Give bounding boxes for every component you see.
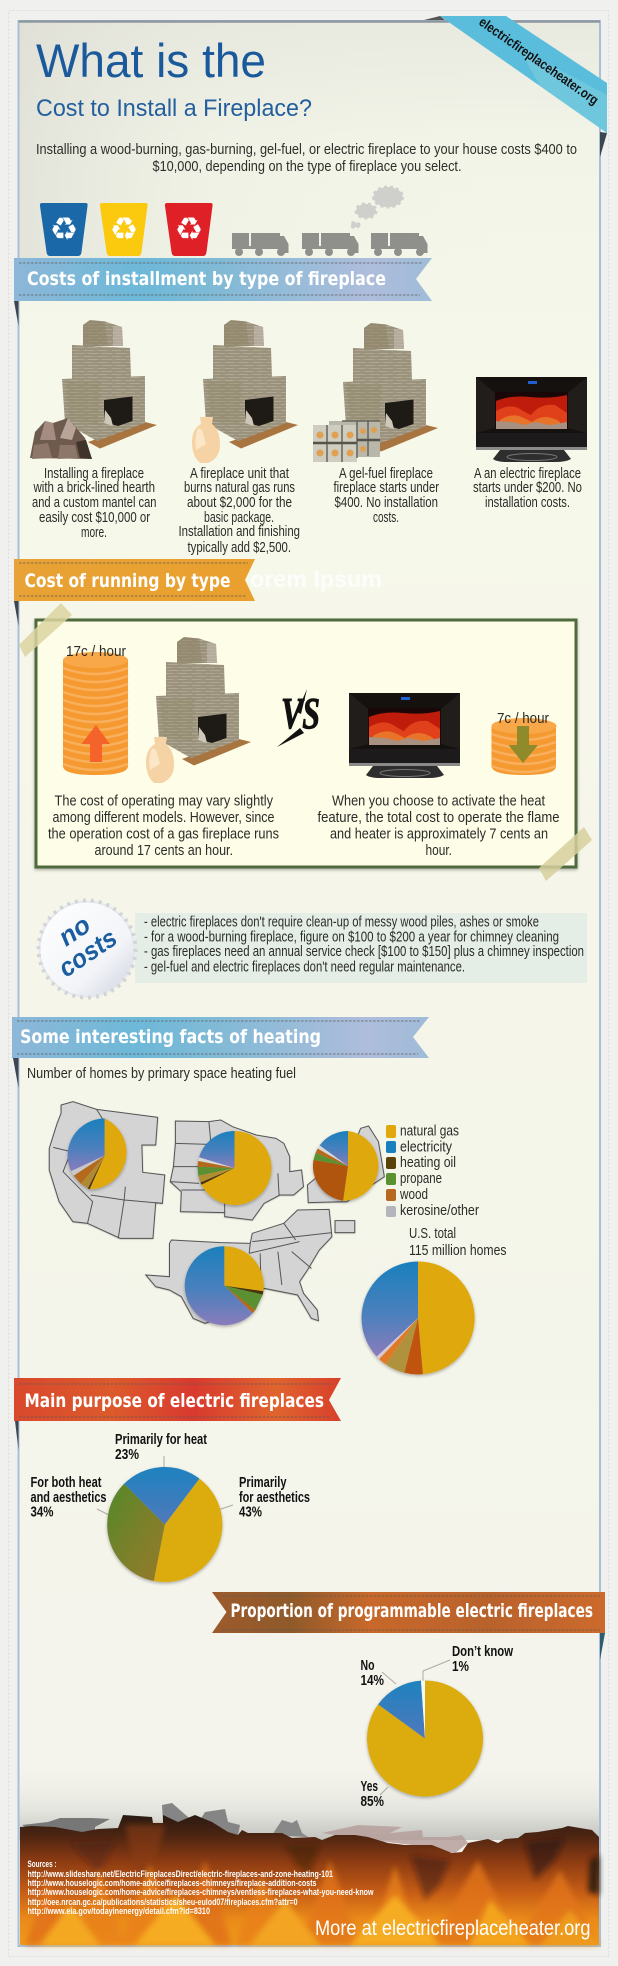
label: primarily for heat: 23% [115,1446,139,1463]
caption: wood fireplace: Installing a fireplace [44,465,144,482]
panel: running cost comparison [19,603,592,881]
vs mark: VS [281,689,320,738]
pie: Northeast [313,1131,378,1201]
pie: West [68,1118,127,1189]
legend: wood [399,1186,428,1203]
legend: propane [400,1170,442,1187]
band: no costs list: - gel-fuel and electric fireplaces don't need regular maintenance. [144,958,465,976]
caption: electric running cost: hour. [426,842,452,859]
caption: gel fireplace: $400. No installation [334,494,438,511]
stack chart: electric cost [492,710,556,775]
electric fireplace [349,693,460,778]
caption: electric running cost: and heater is approximately 7 cents an [330,826,548,842]
title: Cost to Install a Fireplace? [36,95,312,122]
fireplace: gas [192,320,298,463]
pie: programmable [360,1643,513,1810]
maps of US regions [49,1102,384,1323]
fireplace: electric [476,377,587,462]
label: both [30,1474,106,1520]
icon: no costs bottle cap [38,900,136,998]
icon: gel fuel cans [313,420,380,462]
icon: recycling bins: ♻ [50,210,78,248]
intro text: $10,000, depending on the type of fireplace you select. [152,158,462,175]
sources: http://oee.nrcan.gc.ca/publications/statistics/sheu-eulod07/fireplaces.cfm?attr=0 [28,1897,298,1908]
tape [19,603,72,657]
caption: electric fireplace: starts under $200. No [473,479,582,496]
caption: gel fireplace: fireplace starts under [334,479,439,496]
label: no [360,1657,384,1689]
sources: http://www.houselogic.com/home-advice/fireplaces-chimneys/fireplace-addition-costs [28,1878,316,1889]
stack chart: gas cost [63,643,128,775]
caption: gas fireplace [178,465,300,556]
banner: interesting facts [12,1017,429,1088]
fireplace: gel fuel [313,323,438,462]
legend: natural gas [400,1122,459,1140]
gas fireplace [146,637,251,783]
band: no costs list [135,913,587,983]
pie: main purpose [30,1431,310,1582]
caption: gas fireplace: about $2,000 for the [187,494,292,511]
corner ribbon [424,14,607,157]
caption: gel fireplace: A gel-fuel fireplace [339,465,433,482]
banner: cost of running [14,559,255,626]
icon: trucks [232,233,428,256]
caption: electric fireplace: A an electric fireplace [474,465,581,482]
caption: wood fireplace: with a brick-lined hearth [33,479,155,496]
label: primarily for heat [115,1431,207,1463]
banner: programmable [212,1592,605,1660]
label: both: and aesthetics [30,1489,106,1506]
icon: smoke cloud [351,187,402,228]
caption: wood fireplace: more. [81,524,107,541]
caption: gas running cost: the operation cost of a gas fireplace runs [48,826,279,842]
caption: electric running cost [318,792,560,859]
chart heading: Number of homes by primary space heating fuel [27,1065,296,1082]
sources: Sources : [28,1859,56,1870]
vs mark [277,689,320,747]
caption: gas fireplace: burns natural gas runs [184,479,295,496]
title [36,34,312,122]
ghost text: orem Ipsum [250,566,382,592]
banner: interesting facts: Some interesting facts of heating [20,1026,321,1048]
label: no: 14% [360,1672,384,1689]
label: don't know: Don’t know [452,1643,513,1660]
sources: http://www.houselogic.com/home-advice/fireplaces-chimneys/ventless-fireplaces-what-you-need-know [28,1887,374,1898]
stack chart: electric cost: 7c / hour [497,710,549,727]
US total label: 115 million homes [409,1242,506,1259]
caption: gas running cost [48,792,279,859]
caption: electric fireplace: installation costs. [485,494,570,511]
icon: no costs bottle cap: no [53,909,96,952]
label: both: For both heat [30,1474,102,1491]
caption: electric running cost: feature, the total cost to operate the flame [318,809,560,826]
banner: main purpose [14,1378,341,1450]
icon: recycling bins: ♻ [175,210,203,248]
tape [539,827,592,881]
caption: electric fireplace [473,465,582,511]
label: both: 34% [30,1504,54,1520]
label: aesthetics: Primarily [239,1474,287,1491]
label: aesthetics [239,1474,310,1520]
sources [28,1859,374,1917]
banner: main purpose: Main purpose of electric fireplaces [24,1390,324,1412]
banner: costs of installment [14,258,432,326]
US total label [409,1225,506,1259]
label: aesthetics: for aesthetics [239,1489,310,1506]
label: yes [360,1778,384,1810]
banner: cost of running: Cost of running by type [24,570,230,592]
caption: wood fireplace: easily cost $10,000 or [39,509,150,526]
title: What is the [36,34,266,87]
caption: gas running cost: among different models. However, since [52,809,274,826]
banner: costs of installment: Costs of installment by type of fireplace [27,268,386,290]
caption: gas fireplace: basic package. [204,509,274,526]
icon: no costs bottle cap: costs [53,922,122,983]
caption: gas fireplace: A fireplace unit that [190,465,290,482]
sources: http://www.slideshare.net/ElectricFireplacesDirect/electric-fireplaces-and-zone-heating-101 [28,1869,334,1880]
legend: heating oil [400,1154,456,1171]
pie: Midwest [198,1131,271,1205]
caption: wood fireplace [32,465,156,541]
label: don't know: 1% [452,1658,469,1675]
intro text [36,141,577,175]
caption: electric running cost: When you choose to activate the heat [332,792,546,810]
icon: recycling bins [40,203,213,256]
caption: gel fireplace: costs. [373,509,399,526]
label: yes: 85% [360,1793,384,1810]
stack chart: gas cost: 17c / hour [66,643,126,660]
legend: kerosine/other [400,1202,479,1219]
icon: recycling bins: ♻ [110,210,138,248]
fireplace: wood [30,320,157,459]
label: don't know [452,1643,513,1675]
caption: gas running cost: around 17 cents an hour. [94,842,233,859]
label: aesthetics: 43% [239,1504,262,1520]
footer flames [20,1770,599,1945]
pie: South [185,1246,264,1325]
US total label: U.S. total [409,1225,456,1242]
caption: gas fireplace: typically add $2,500. [188,539,291,556]
legend: electricity [400,1138,452,1156]
pie: US total [362,1261,475,1375]
label: no: No [360,1657,374,1674]
caption: gas running cost: The cost of operating may vary slightly [54,792,273,810]
icon: wood pile [30,418,92,459]
sources: http://www.eia.gov/todayinenergy/detail.cfm?id=8310 [28,1906,210,1917]
label: primarily for heat: Primarily for heat [115,1431,207,1448]
caption: gel fireplace [334,465,439,526]
caption: gas fireplace: Installation and finishing [178,523,300,540]
label: yes: Yes [360,1778,378,1795]
legend [386,1122,479,1219]
caption: wood fireplace: and a custom mantel can [32,494,156,511]
